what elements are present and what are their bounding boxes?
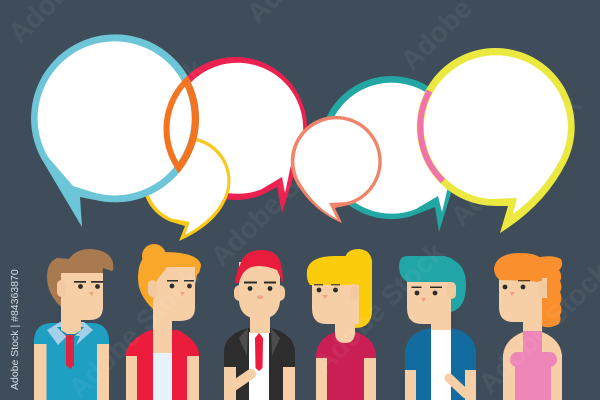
collar (47, 322, 93, 345)
hair back (440, 257, 466, 312)
dress (510, 330, 557, 400)
face details (518, 280, 530, 281)
jacket (405, 328, 476, 400)
watermark: Adobe Stock (307, 236, 451, 379)
tie (255, 333, 263, 371)
face details (412, 286, 422, 288)
face details (74, 281, 86, 283)
neck and head (407, 278, 451, 330)
arms (224, 367, 295, 400)
person 6: orange curly hair woman (494, 253, 562, 400)
stock id caption: Adobe Stock | #84363870 (9, 269, 21, 390)
hand (449, 378, 466, 394)
person 3: man in black jacket (224, 250, 295, 400)
head (239, 262, 280, 319)
shirt (249, 332, 269, 400)
person 5: teal hair man (399, 256, 476, 400)
body skin (503, 332, 562, 400)
jacket (224, 328, 295, 400)
hair (235, 250, 283, 283)
shirt (431, 329, 451, 400)
hair top (307, 256, 372, 285)
arms (126, 356, 199, 400)
watermark: Adobe Stock (62, 261, 206, 400)
neck and head (312, 280, 359, 343)
face details (314, 284, 323, 285)
arms (316, 358, 376, 400)
ear (148, 280, 157, 297)
speech bubble: yellow small (142, 137, 230, 241)
watermark: Adobe Stock (444, 89, 588, 232)
overlap lens: orange (164, 76, 199, 174)
hair top (399, 256, 453, 282)
hair bun (142, 244, 166, 268)
ear (57, 280, 66, 297)
shirt (153, 353, 172, 400)
ear (350, 285, 359, 300)
jacket (126, 330, 199, 400)
lapels (239, 328, 280, 356)
hand (232, 374, 251, 387)
curly hair back (535, 256, 562, 327)
shirt (34, 323, 109, 400)
collar inner (57, 327, 84, 336)
ear (538, 281, 547, 298)
person 2: red jacket woman (126, 244, 201, 400)
speech bubble: salmon small (291, 116, 382, 223)
tie (66, 335, 74, 369)
watermark: Adobe Stock (204, 129, 348, 272)
hair top (494, 253, 542, 282)
neck and head (153, 267, 195, 353)
neck (250, 310, 270, 333)
speech bubble: light blue large (31, 34, 199, 227)
arms (405, 370, 476, 400)
face details (244, 282, 257, 284)
hair (138, 252, 201, 309)
shirt (316, 332, 376, 400)
person 4: blonde woman (307, 249, 376, 400)
face details (167, 280, 178, 282)
ears (234, 285, 285, 301)
person 1: blue polo man (34, 249, 113, 400)
speech bubble: lime large (417, 48, 575, 233)
speech bubble: teal (320, 76, 463, 232)
overlap arc: pink (420, 91, 443, 181)
speech bubble: red (164, 57, 307, 213)
watermark: Adobe Stock (67, 53, 211, 196)
neck and head (499, 278, 547, 331)
hair (47, 249, 113, 308)
arms (34, 344, 109, 400)
ponytail (345, 249, 372, 328)
ear (447, 282, 456, 299)
neck and head (61, 273, 103, 334)
